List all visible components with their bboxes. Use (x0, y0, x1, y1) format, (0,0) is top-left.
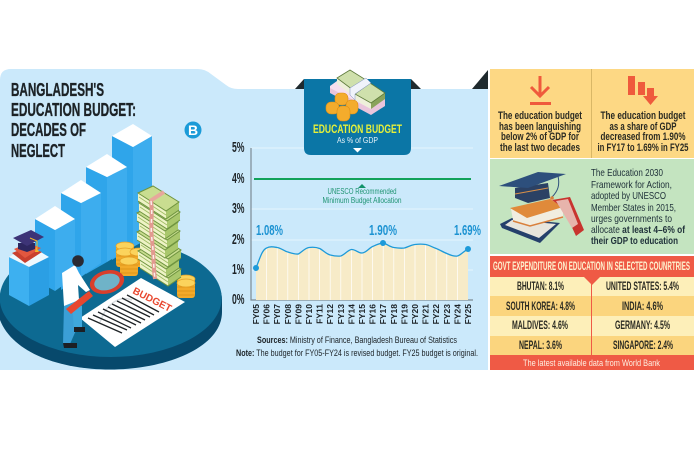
panel: key facts yellow (490, 69, 694, 158)
text: UNESCO framework: The Education 2030 (591, 167, 663, 179)
UNESCO line (254, 179, 471, 205)
table footer: The latest available data from World Bank (523, 358, 660, 369)
chart: education budget line (232, 140, 481, 324)
table rows: BHUTAN: 8.1% (517, 281, 564, 293)
text: UNESCO framework (591, 167, 685, 247)
x axis labels: FY08 (283, 304, 293, 324)
x axis labels: FY13 (336, 304, 346, 324)
x axis labels: FY20 (410, 304, 420, 324)
text: fact one: the last two decades (500, 142, 580, 154)
y axis labels: 3% (232, 201, 245, 217)
text: fact one (498, 110, 582, 154)
title: EDUCATION BUDGET: (11, 100, 136, 120)
person with magnifier (62, 255, 127, 348)
panel: government expenditure table (490, 256, 694, 370)
money stack (137, 186, 181, 286)
title: DECADES OF (11, 120, 86, 140)
icon: falling bars (628, 76, 658, 105)
table rows: MALDIVES: 4.6% (512, 320, 568, 332)
icon: money and coins (326, 70, 385, 121)
table rows (506, 281, 679, 352)
legend box: education budget (304, 70, 411, 155)
text: UNESCO framework: urges governments to (591, 213, 672, 225)
y axis labels: 4% (232, 171, 245, 187)
icon: books and graduation cap (499, 172, 584, 243)
x axis labels: FY24 (452, 304, 462, 324)
corner fold triangles (295, 70, 488, 89)
title: BANGLADESH'S (11, 80, 104, 100)
legend box: education budget: EDUCATION BUDGET (313, 124, 402, 136)
x axis labels: FY15 (357, 304, 367, 324)
text: UNESCO framework: Framework for Action, (591, 179, 672, 191)
text: fact one: below 2% of GDP for (501, 131, 580, 143)
text: fact two (598, 110, 688, 154)
UNESCO line: UNESCO Recommended (328, 187, 396, 196)
sources note (236, 335, 478, 358)
y axis labels: 5% (232, 140, 245, 156)
icon: logo: B (188, 122, 198, 138)
y axis labels: 2% (232, 232, 245, 248)
text: fact one: The education budget (498, 110, 582, 122)
x axis labels: FY07 (272, 304, 282, 324)
x axis labels: FY17 (378, 304, 388, 324)
x axis labels: FY12 (325, 304, 335, 324)
sources note: Note: The budget for FY05-FY24 is revised budget. FY25 budget is original. (236, 348, 478, 358)
y axis labels (232, 140, 245, 308)
data labels: 1.69% (454, 223, 481, 239)
data labels: 1.90% (369, 223, 397, 239)
x axis labels: FY14 (346, 304, 356, 324)
document (80, 278, 185, 347)
x axis labels: FY22 (431, 304, 441, 324)
icon: down arrow (530, 76, 551, 104)
x axis labels: FY06 (262, 304, 272, 324)
table rows: NEPAL: 3.6% (519, 340, 562, 352)
ascending bars (9, 124, 152, 306)
y axis (251, 148, 473, 300)
x axis labels (251, 304, 473, 324)
platform disc (0, 237, 222, 370)
area and line (253, 240, 471, 300)
UNESCO line: Minimum Budget Allocation (322, 196, 402, 205)
x axis labels: FY10 (304, 304, 314, 324)
icon: logo (184, 122, 202, 138)
grid lines (251, 148, 473, 270)
x axis labels: FY23 (442, 304, 452, 324)
y axis labels: 0% (232, 292, 245, 308)
x axis labels: FY11 (315, 304, 325, 324)
data labels: 1.08% (256, 223, 283, 239)
table rows: INDIA: 4.6% (622, 301, 663, 313)
panel: UNESCO framework green (490, 159, 694, 254)
legend box: education budget: As % of GDP (337, 136, 378, 145)
x axis labels: FY09 (293, 304, 303, 324)
table rows: SOUTH KOREA: 4.8% (506, 301, 575, 313)
title: NEGLECT (11, 141, 65, 161)
document: BUDGET (131, 286, 173, 315)
sources note: Sources: Ministry of Finance, Bangladesh Bureau of Statistics (257, 335, 457, 345)
y axis labels: 1% (232, 262, 245, 278)
text: UNESCO framework: adopted by UNESCO (591, 190, 666, 202)
x axis labels: FY19 (399, 304, 409, 324)
x axis labels: FY18 (389, 304, 399, 324)
x axis labels: FY25 (463, 304, 473, 324)
title (11, 80, 136, 161)
text: fact one: has been languishing (499, 121, 581, 133)
x axis labels: FY05 (251, 304, 261, 324)
x axis labels: FY21 (421, 304, 431, 324)
icon: books and cap on pedestal (12, 230, 44, 263)
illustration: budget platform with bars, money and inspector (0, 124, 222, 370)
x axis labels: FY16 (368, 304, 378, 324)
coins (116, 242, 195, 298)
panel: main light-blue background (0, 69, 488, 370)
data labels (256, 223, 481, 239)
